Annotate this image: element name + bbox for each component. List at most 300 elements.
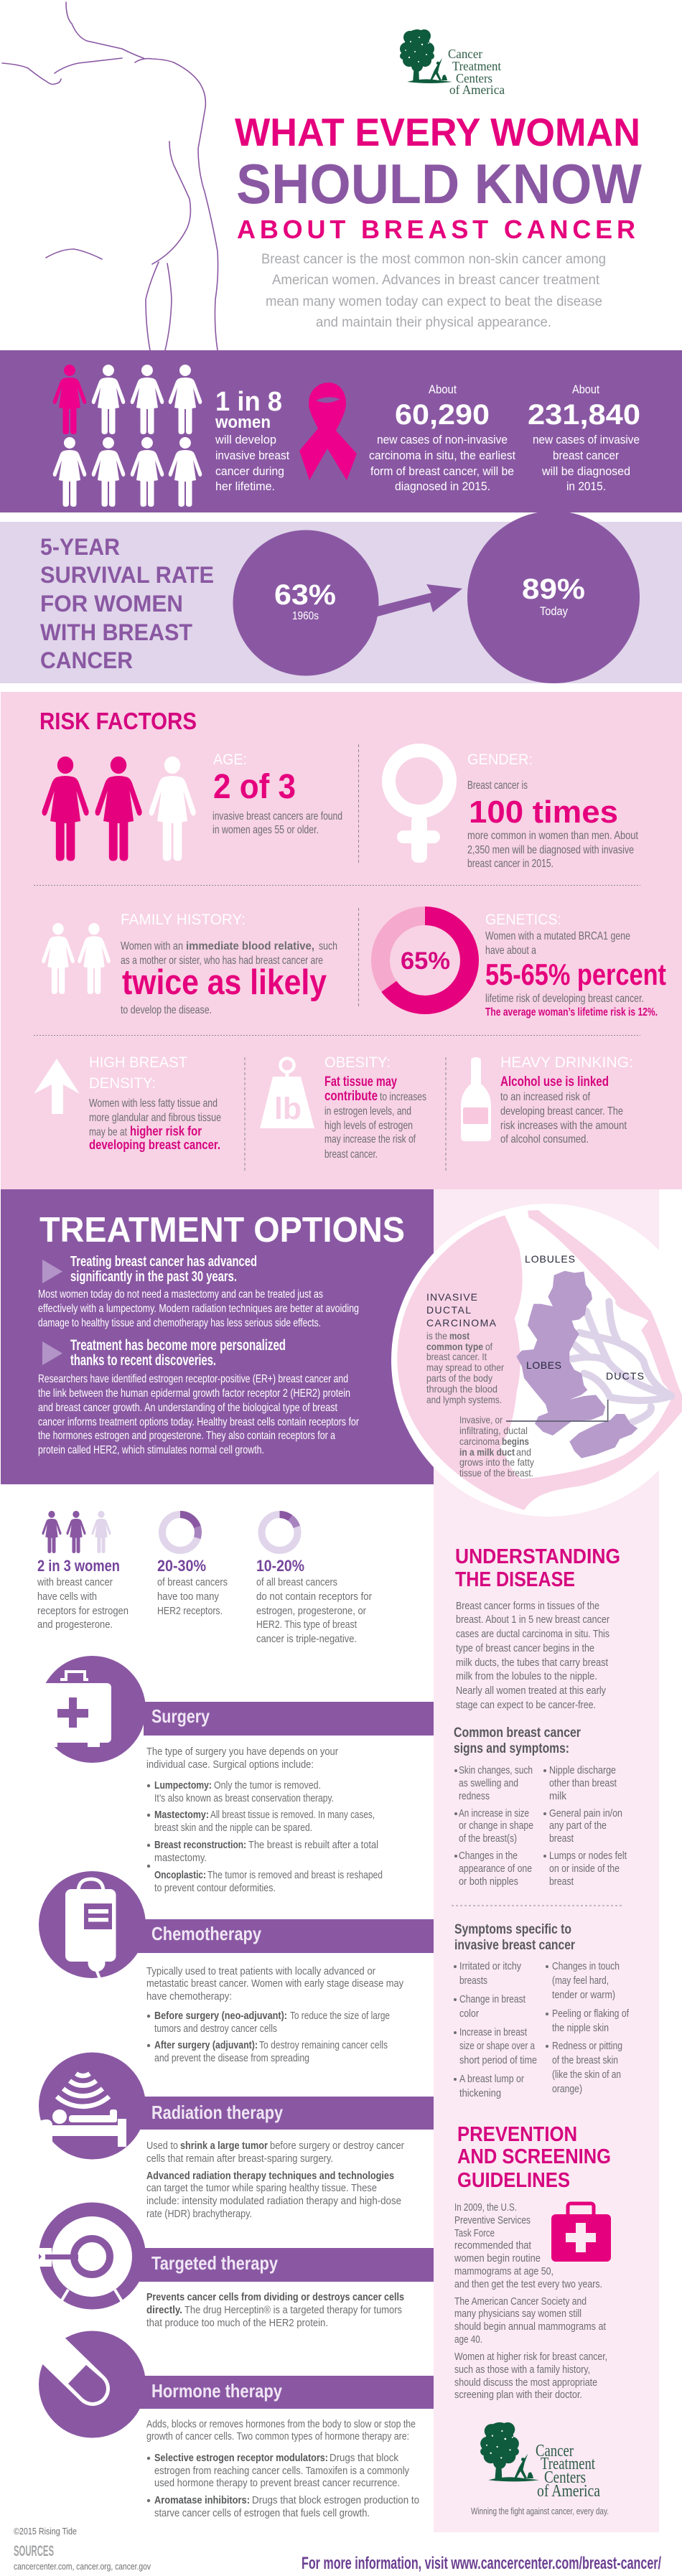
text: invasive ductal carcinoma: DUCTAL (426, 1304, 471, 1316)
panel: prevention and screening guidelines (454, 2123, 611, 2516)
panel: understanding the disease (452, 1545, 630, 2099)
text: infiltrating callout: tissue of the breast. (459, 1467, 533, 1479)
list: common signs column two: breast (549, 1875, 574, 1888)
list: common signs column two: on or inside of the (549, 1863, 620, 1875)
text: targeted details: The drug Herceptin® is a targeted therapy for tumors (184, 2304, 402, 2316)
stat: 10-20%: estrogen, progesterone, or (256, 1605, 366, 1617)
stat: 10-20% (256, 1514, 372, 1645)
footer: copyright and sources (14, 2526, 151, 2572)
text: screening guidance: and then get the test every two years. (454, 2278, 602, 2290)
stat: 60,290: new cases of non-invasive (377, 433, 508, 446)
text: more personalized: and breast cancer growth. An understanding of the biological type of breast (38, 1402, 337, 1414)
list: invasive symptoms column two: (may feel hard, (552, 1975, 609, 1987)
stat: 231,840: new cases of invasive (533, 433, 640, 446)
labels: LOBES (526, 1359, 561, 1371)
text: invasive ductal carcinoma: and lymph systems. (426, 1394, 502, 1405)
text: more personalized: the link between the human epidermal growth factor receptor 2 (HER2) protein (38, 1387, 350, 1400)
text: screening guidance: screening plan with their doctor. (454, 2389, 582, 2401)
text: gender: 2,350 men will be diagnosed with invasive (467, 844, 634, 856)
text: surgery details: to prevent contour deformities. (154, 1882, 276, 1894)
stat: 2 in 3 women: with breast cancer (37, 1576, 113, 1588)
text: age: AGE: (213, 751, 247, 768)
section: surgery (29, 1656, 434, 1894)
icon: eight women, one in pink (53, 365, 202, 507)
list: common signs column two: Nipple discharge (549, 1764, 616, 1776)
text: hormone details: used hormone therapy to prevent breast cancer recurrence. (154, 2477, 400, 2489)
text: surgery details: Only the tumor is removed. (214, 1779, 321, 1792)
text: gender: more common in women than men. About (467, 830, 638, 842)
chart: 65% donut (380, 916, 470, 1005)
list: common signs column two: Lumps or nodes felt (549, 1850, 627, 1862)
text: invasive ductal carcinoma: through the blood (426, 1383, 498, 1395)
text: 1 in 8 women: invasive breast (215, 449, 289, 462)
text: high breast density: HIGH BREAST (89, 1054, 187, 1071)
text: treating breast cancer: Treating breast cancer has advanced (70, 1254, 257, 1270)
intro text: mean many women today can expect to beat the disease (266, 294, 602, 309)
logo: Cancer Treatment Centers of America: of America (449, 83, 505, 97)
text: radiation details: shrink a large tumor (180, 2140, 268, 2152)
icon: female symbol (389, 751, 449, 863)
icon: radiation bed (37, 2053, 146, 2159)
text: invasive ductal carcinoma: common type (426, 1341, 483, 1352)
text: surgery details: breast skin and the nipple can be spared. (154, 1822, 312, 1834)
text: family history: as a mother or sister, who has had breast cancer are (121, 955, 323, 967)
labels (525, 1253, 644, 1382)
list: invasive symptoms column one: Change in breast (459, 1993, 526, 2005)
text: surgery details: It’s also known as breast conservation therapy. (154, 1792, 334, 1804)
text: gender: Breast cancer is (467, 779, 528, 792)
list: invasive symptoms column two: Changes in touch (552, 1960, 620, 1972)
text: surgery details: individual case. Surgical options include: (146, 1758, 314, 1771)
text: disease description: type of breast cancer begins in the (456, 1642, 594, 1654)
subheading: common signs: signs and symptoms: (454, 1741, 569, 1756)
stat: 2 in 3 women (37, 1511, 129, 1631)
text: family history: such (319, 940, 337, 952)
text: 1 in 8 women (215, 387, 289, 493)
text: high breast density: developing breast cancer. (89, 1138, 220, 1152)
chart: 63% circle: 1960s (292, 610, 319, 622)
list: common signs column one: of the breast(s) (459, 1832, 517, 1845)
body line art (2, 2, 218, 350)
icon: capsule (39, 2331, 146, 2437)
text: radiation details: rate (HDR) brachytherapy. (146, 2208, 252, 2220)
icon: medical bag (29, 1656, 146, 1763)
stat: 10-20%: HER2. This type of breast (256, 1619, 358, 1631)
heading: prevention (457, 2123, 611, 2192)
list: invasive symptoms column one: thickening (459, 2087, 501, 2099)
text: more personalized: Researchers have identified estrogen receptor-positive (ER+) breast cancer and (38, 1373, 348, 1385)
text: obesity (324, 1054, 426, 1161)
section: targeted therapy (37, 2202, 434, 2329)
text: disease description (456, 1600, 609, 1711)
list: common signs column two: milk (549, 1790, 566, 1802)
stat: 2 in 3 women: receptors for estrogen (37, 1605, 129, 1617)
icon: two women (42, 923, 111, 994)
text: chemotherapy details (146, 1965, 403, 2064)
text: infiltrating callout (459, 1414, 534, 1479)
text: hormone details: Drugs that block (330, 2452, 398, 2464)
text: invasive ductal carcinoma: parts of the body (426, 1372, 492, 1384)
text: hormone details: estrogen from reaching cancer cells. Tamoxifen is a commonly (154, 2465, 409, 2477)
ducts (572, 1301, 671, 1423)
heading: understanding the disease: THE DISEASE (455, 1568, 575, 1591)
heading: prevention: AND SCREENING (457, 2145, 611, 2168)
chart: 89% circle: 89% (522, 573, 585, 605)
stat: 10-20%: of all breast cancers (256, 1576, 337, 1588)
stat: 231,840: in 2015. (566, 479, 606, 493)
stat: 10-20%: 10-20% (256, 1557, 304, 1575)
heading bar: surgery (144, 1702, 434, 1736)
text: more personalized (38, 1337, 360, 1456)
list: common signs column one: appearance of one (459, 1863, 532, 1875)
heading: survival rate: FOR WOMEN (40, 591, 183, 617)
logo: footer: Winning the fight against cancer, every day. (471, 2506, 609, 2516)
text: treating breast cancer: damage to healthy tissue and chemotherapy has less serious side effects. (38, 1317, 321, 1329)
list: invasive symptoms column two (546, 1960, 630, 2095)
panel: statistics band (0, 350, 682, 512)
icon: triangle bullet (42, 1260, 62, 1283)
text: obesity: in estrogen levels, and (324, 1105, 411, 1118)
text: chemotherapy details: Before surgery (neo-adjuvant): (154, 2010, 287, 2022)
text: infiltrating callout: Invasive, or (459, 1414, 503, 1425)
text: gender: GENDER: (467, 751, 533, 768)
labels: DUCTS (606, 1370, 644, 1382)
text: family history: immediate blood relative, (186, 940, 314, 952)
heading: prevention: PREVENTION (457, 2123, 577, 2146)
text: infiltrating callout: begins (502, 1435, 529, 1447)
text: genetics: GENETICS: (485, 912, 561, 928)
title: ABOUT BREAST CANCER (237, 215, 635, 244)
heading: survival rate (40, 534, 214, 673)
chart: 89% circle: Today (540, 604, 568, 618)
text: treating breast cancer: Most women today do not need a mastectomy and can be treated just as (38, 1288, 323, 1301)
intro text: and maintain their physical appearance. (316, 315, 551, 330)
text: invasive ductal carcinoma: breast cancer. It (426, 1351, 487, 1362)
text: invasive ductal carcinoma (426, 1291, 504, 1405)
list: common signs column one: or both nipples (459, 1875, 518, 1888)
icon: weight: lb (274, 1092, 302, 1126)
heading bar: chemotherapy: Chemotherapy (151, 1923, 261, 1944)
text: gender: 100 times (469, 795, 618, 830)
text: screening guidance: such as those with a family history, (454, 2364, 590, 2376)
text: age: 2 of 3 (213, 768, 296, 806)
text: family history: Women with an (121, 940, 183, 952)
text: invasive ductal carcinoma: may spread to other (426, 1362, 504, 1373)
subheading: common signs: Common breast cancer (454, 1725, 581, 1741)
text: 1 in 8 women: cancer during (215, 464, 284, 478)
subheading: invasive symptoms: invasive breast cancer (454, 1938, 575, 1953)
stat: 60,290: diagnosed in 2015. (395, 479, 490, 493)
text: chemotherapy details: Typically used to treat patients with locally advanced or (146, 1965, 375, 1977)
list: invasive symptoms column two: tender or warm) (552, 1989, 615, 2001)
text: surgery details: mastectomy. (154, 1852, 207, 1864)
chart: 63% circle (233, 530, 379, 676)
text: targeted details (146, 2291, 404, 2329)
text: high breast density: DENSITY: (89, 1075, 156, 1092)
text: chemotherapy details: To reduce the size of large (290, 2010, 390, 2022)
section: chemotherapy (39, 1871, 434, 2064)
list: common signs column one: An increase in size (459, 1807, 529, 1819)
list: common signs column two (543, 1764, 627, 1888)
text: targeted details: that produce too much of the HER2 protein. (146, 2317, 328, 2329)
list: common signs column one: redness (459, 1790, 490, 1802)
footer: copyright and sources: ©2015 Rising Tide (14, 2526, 77, 2537)
text: screening guidance: Women at higher risk for breast cancer, (454, 2351, 607, 2363)
pink tissue (397, 1210, 682, 1510)
stat: 60,290: form of breast cancer, will be (370, 464, 514, 478)
text: heavy drinking: developing breast cancer. The (500, 1105, 623, 1118)
list: common signs column two: General pain in/on (549, 1807, 622, 1819)
heading bar: targeted therapy (136, 2248, 434, 2282)
text: obesity: high levels of estrogen (324, 1120, 413, 1132)
heading: risk factors: RISK FACTORS (39, 708, 197, 734)
list: invasive symptoms column two: Peeling or flaking of (552, 2008, 630, 2020)
text: disease description: Nearly all women treated at this early (456, 1685, 606, 1697)
labels: LOBULES (525, 1253, 575, 1265)
logo: footer: Cancer (536, 2442, 574, 2460)
arrow (375, 584, 462, 617)
stat: 231,840 (528, 383, 640, 493)
text: screening guidance (454, 2201, 607, 2401)
text: disease description: breast. About 1 in 5 new breast cancer (456, 1613, 609, 1626)
title: WHAT EVERY WOMAN (235, 110, 640, 154)
list: invasive symptoms column one: short period of time (459, 2054, 537, 2066)
subheading: invasive symptoms (454, 1922, 575, 1953)
text: heavy drinking: HEAVY DRINKING: (500, 1054, 633, 1071)
text: more personalized: cancer informs treatment options today. Healthy breast cells contain receptors for (38, 1416, 360, 1428)
text: chemotherapy details: have chemotherapy: (146, 1990, 232, 2003)
text: hormone details: Adds, blocks or removes hormones from the body to slow or stop the (146, 2418, 416, 2430)
text: high breast density: more glandular and fibrous tissue (89, 1112, 221, 1124)
text: screening guidance: age 40. (454, 2333, 482, 2346)
text: infiltrating callout: infiltrating, ductal (459, 1425, 528, 1436)
list: common signs column two: other than breast (549, 1777, 617, 1789)
list: invasive symptoms column one: color (459, 2008, 479, 2020)
logo: Cancer Treatment Centers of America: Cancer (448, 47, 482, 61)
subheading: common signs (454, 1725, 581, 1756)
text: invasive ductal carcinoma: most (449, 1330, 470, 1341)
text: 1 in 8 women: 1 in 8 (215, 387, 282, 417)
stat: 20-30%: 20-30% (157, 1557, 206, 1575)
text: surgery details: The type of surgery you have depends on your (146, 1746, 338, 1758)
heading: survival rate: 5-YEAR (40, 534, 120, 560)
text: more personalized: the hormones estrogen and progesterone. They also contain receptors for a (38, 1430, 335, 1442)
text: more personalized: protein called HER2, which stimulates normal cell growth. (38, 1444, 264, 1456)
icon: IV bag (39, 1871, 146, 1979)
text: screening guidance: should discuss the most appropriate (454, 2376, 597, 2389)
heading bar: targeted therapy: Targeted therapy (151, 2252, 278, 2274)
text: hormone details: Drugs that block estrogen production to (252, 2494, 419, 2506)
text: genetics: Women with a mutated BRCA1 gene (485, 930, 630, 942)
icon: weight (260, 1058, 314, 1128)
text: family history: to develop the disease. (121, 1004, 212, 1016)
stat: 60,290: carcinoma in situ, the earliest (369, 449, 515, 462)
text: screening guidance: women begin routine (454, 2252, 541, 2264)
text: 1 in 8 women: women (215, 413, 271, 432)
text: disease description: stage can expect to be cancer-free. (456, 1699, 596, 1711)
stat: 60,290: 60,290 (395, 399, 490, 431)
text: screening guidance: many physicians say women still (454, 2308, 581, 2320)
text: surgery details: The breast is rebuilt after a total (248, 1839, 378, 1851)
text: infiltrating callout: grows into the fatty (459, 1456, 534, 1468)
text: screening guidance: mammograms at age 50, (454, 2265, 553, 2277)
stat: 2 in 3 women: and progesterone. (37, 1619, 113, 1631)
text: invasive ductal carcinoma: is the (426, 1330, 447, 1341)
subheading: invasive symptoms: Symptoms specific to (454, 1922, 571, 1937)
list: invasive symptoms column one: Irritated or itchy (459, 1960, 521, 1972)
text: 1 in 8 women: will develop (215, 433, 276, 446)
chart: 89% circle (467, 511, 640, 683)
text: 1 in 8 women: her lifetime. (215, 479, 275, 493)
title: SHOULD KNOW (236, 152, 642, 215)
text: treating breast cancer: significantly in the past 30 years. (70, 1269, 237, 1285)
text: hormone details: Aromatase inhibitors: (154, 2494, 250, 2506)
text: screening guidance: should begin annual mammograms at (454, 2320, 607, 2333)
text: surgery details: Oncoplastic: (154, 1869, 206, 1881)
chart: 63% circle: 63% (274, 579, 336, 611)
text: chemotherapy details: metastatic breast cancer. Women with early stage disease may (146, 1977, 403, 1990)
heading bar: hormone therapy (136, 2376, 434, 2409)
heading: treatment options: TREATMENT OPTIONS (39, 1211, 405, 1250)
text: targeted details: directly. (146, 2304, 182, 2316)
intro text: American women. Advances in breast cancer treatment (272, 273, 600, 288)
text: disease description: cases are ductal carcinoma in situ. This (456, 1628, 609, 1640)
stat: 60,290: About (429, 383, 457, 396)
heading bar: chemotherapy (136, 1919, 434, 1953)
heading bar: surgery: Surgery (151, 1705, 210, 1727)
text: high breast density: higher risk for (130, 1124, 202, 1138)
list: common signs column one: Skin changes, such (459, 1764, 533, 1776)
text: screening guidance: Task Force (454, 2227, 495, 2239)
logo: Cancer Treatment Centers of America: Treatment (452, 59, 501, 73)
icon: triangle bullet (42, 1341, 62, 1365)
stat: 20-30% (157, 1514, 228, 1617)
text: genetics (485, 912, 666, 1018)
logo: Cancer Treatment Centers of America: Centers (456, 71, 492, 85)
text: treating breast cancer (38, 1254, 359, 1329)
text: family history (121, 912, 337, 1016)
section: radiation therapy (37, 2053, 434, 2220)
footer: copyright and sources: cancercenter.com, cancer.org, cancer.gov (14, 2562, 151, 2572)
stat: 20-30%: have too many (157, 1591, 219, 1603)
heading: survival rate: CANCER (40, 647, 133, 673)
text: chemotherapy details: To destroy remaining cancer cells (259, 2039, 388, 2051)
text: high breast density (89, 1054, 221, 1152)
chart: 65% donut: 65% (401, 947, 450, 975)
text: gender (467, 751, 638, 870)
logo: footer: of America (537, 2482, 600, 2501)
text: obesity: breast cancer. (324, 1148, 378, 1161)
text: age: in women ages 55 or older. (212, 824, 319, 836)
text: family history: FAMILY HISTORY: (121, 912, 246, 928)
stat: 2 in 3 women: have cells with (37, 1591, 97, 1603)
panel: risk factors (1, 692, 682, 1189)
text: infiltrating callout: carcinoma (459, 1435, 500, 1447)
list: invasive symptoms column two: of the breast skin (552, 2054, 618, 2066)
list: invasive symptoms column two: orange) (552, 2083, 582, 2095)
illustration: breast anatomy (391, 1204, 682, 1517)
stat: 60,290 (369, 383, 515, 493)
stat: 20-30%: HER2 receptors. (157, 1605, 223, 1617)
text: hormone details (146, 2418, 419, 2519)
text: screening guidance: In 2009, the U.S. (454, 2201, 517, 2214)
logo: Cancer Treatment Centers of America (400, 29, 505, 97)
text: surgery details: Breast reconstruction: (154, 1839, 246, 1851)
text: age: invasive breast cancers are found (212, 810, 342, 823)
text: surgery details (146, 1746, 383, 1894)
heading: survival rate: SURVIVAL RATE (40, 562, 214, 588)
footer: copyright and sources: SOURCES (14, 2543, 54, 2559)
text: heavy drinking: risk increases with the amount (500, 1120, 627, 1132)
heading: understanding the disease: UNDERSTANDING (455, 1545, 620, 1568)
panel: treatment options (1, 1189, 434, 1484)
text: surgery details: The tumor is removed and breast is reshaped (207, 1869, 383, 1881)
text: radiation details (146, 2140, 404, 2220)
text: chemotherapy details: After surgery (adjuvant): (154, 2039, 258, 2051)
list: common signs column one: as swelling and (459, 1777, 518, 1789)
heading bar: radiation therapy: Radiation therapy (151, 2102, 283, 2123)
text: obesity: OBESITY: (324, 1054, 391, 1071)
text: screening guidance: recommended that (454, 2239, 532, 2252)
text: screening guidance: The American Cancer Society and (454, 2295, 587, 2308)
text: disease description: milk from the lobules to the nipple. (456, 1670, 597, 1682)
text: family history: twice as likely (122, 963, 327, 1002)
text: disease description: Breast cancer forms in tissues of the (456, 1600, 599, 1612)
stat: 2 in 3 women: 2 in 3 women (37, 1557, 120, 1575)
heading: understanding the disease (455, 1545, 620, 1591)
callout line (506, 1400, 608, 1421)
logo: footer: Centers (544, 2468, 586, 2487)
panel: 5-year survival rate (0, 511, 682, 683)
text: heavy drinking: of alcohol consumed. (500, 1133, 589, 1146)
icon: three women (42, 757, 196, 861)
list: common signs column two: breast (549, 1832, 574, 1845)
icon: up arrow (34, 1059, 80, 1114)
text: targeted details: Prevents cancer cells from dividing or destroys cancer cells (146, 2291, 404, 2303)
stat: 231,840: breast cancer (553, 449, 619, 462)
text: radiation details: include: intensity modulated radiation therapy and high-dose (146, 2195, 401, 2207)
list: invasive symptoms column one: Increase in breast (459, 2026, 528, 2038)
text: radiation details: before surgery or destroy cancer (270, 2140, 404, 2152)
text: invasive ductal carcinoma: INVASIVE (426, 1291, 477, 1303)
text: gender: breast cancer in 2015. (467, 858, 553, 870)
text: invasive ductal carcinoma: CARCINOMA (426, 1317, 497, 1329)
section: hormone therapy (39, 2331, 434, 2519)
list: invasive symptoms column one: breasts (459, 1975, 487, 1987)
stat: 20-30%: of breast cancers (157, 1576, 228, 1588)
logo: footer: Treatment (541, 2455, 595, 2473)
heading: prevention: GUIDELINES (457, 2169, 570, 2192)
list: invasive symptoms column two: (like the skin of an (552, 2069, 621, 2081)
stat: 10-20%: cancer is triple-negative. (256, 1633, 357, 1645)
lobes (516, 1271, 605, 1435)
stat: 231,840: will be diagnosed (541, 464, 630, 478)
text: more personalized: thanks to recent discoveries. (70, 1352, 216, 1369)
icon: target (37, 2202, 146, 2310)
list: common signs column one: Changes in the (459, 1850, 518, 1862)
logo: footer (471, 2422, 609, 2516)
title (235, 110, 642, 244)
list: invasive symptoms column one: size or shape over a (459, 2040, 536, 2052)
text: hormone details: starve cancer cells of estrogen that fuels cell growth. (154, 2507, 370, 2519)
list: common signs column one (454, 1764, 533, 1888)
text: age (212, 751, 342, 836)
text: infiltrating callout: and (516, 1446, 531, 1458)
panel: right column background (434, 1189, 659, 2532)
text: heavy drinking (500, 1054, 633, 1146)
intro text: Breast cancer is the most common non-skin cancer among (261, 252, 606, 267)
text: hormone details: Selective estrogen receptor modulators: (154, 2452, 328, 2464)
